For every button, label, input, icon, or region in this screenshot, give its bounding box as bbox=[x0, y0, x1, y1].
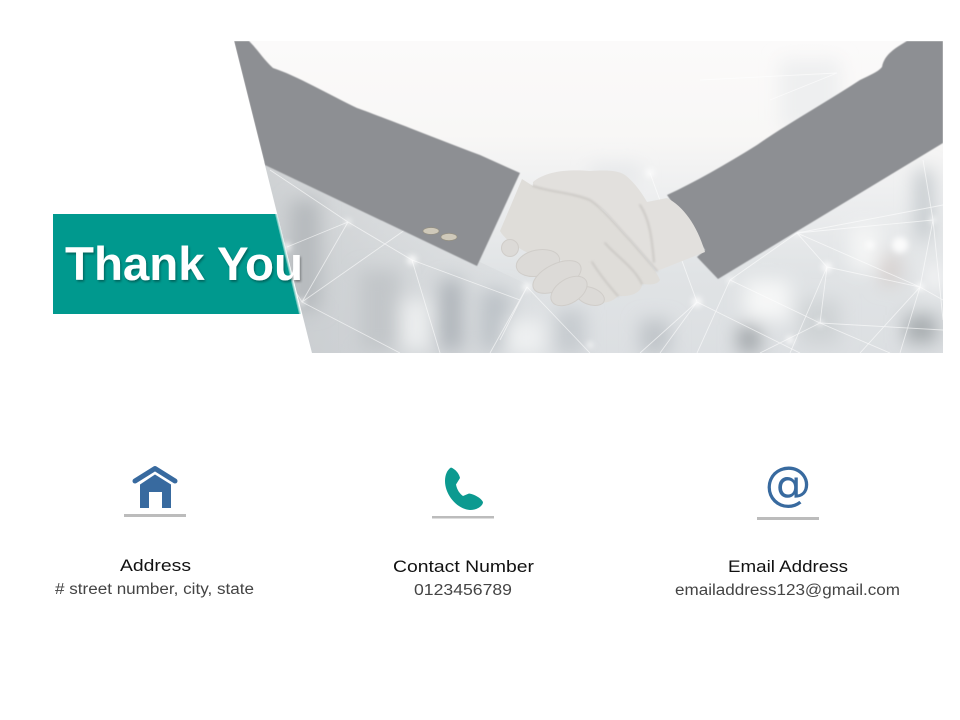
contact: email: emailaddress123@gmail.com bbox=[675, 582, 900, 599]
contact: phone bbox=[393, 468, 535, 599]
right person's hand and thumb bbox=[533, 170, 705, 271]
contact: address: # street number, city, state bbox=[55, 581, 254, 598]
icon: phone bbox=[445, 468, 483, 510]
photo panel: handshake bbox=[230, 41, 945, 355]
icon: house bbox=[135, 468, 175, 508]
right person's lower fingers bbox=[502, 240, 607, 312]
hand shading bbox=[533, 186, 657, 296]
icon: at sign: @ bbox=[764, 457, 812, 512]
contact: phone: 0123456789 bbox=[414, 582, 512, 599]
contact: email: Email Address bbox=[728, 558, 848, 576]
contact: address bbox=[55, 468, 254, 598]
cufflinks bbox=[423, 228, 457, 241]
handshake hands bbox=[500, 170, 705, 312]
title: Thank You bbox=[65, 237, 303, 290]
contact: address: Address bbox=[120, 557, 191, 575]
network glow nodes bbox=[284, 216, 936, 348]
title banner bbox=[53, 214, 303, 314]
left sleeve bbox=[234, 41, 520, 266]
network lines bbox=[270, 73, 943, 353]
contact: email bbox=[675, 457, 900, 599]
right sleeve bbox=[667, 41, 943, 279]
contact: phone: Contact Number bbox=[393, 558, 535, 576]
left person's hand bbox=[500, 179, 660, 303]
